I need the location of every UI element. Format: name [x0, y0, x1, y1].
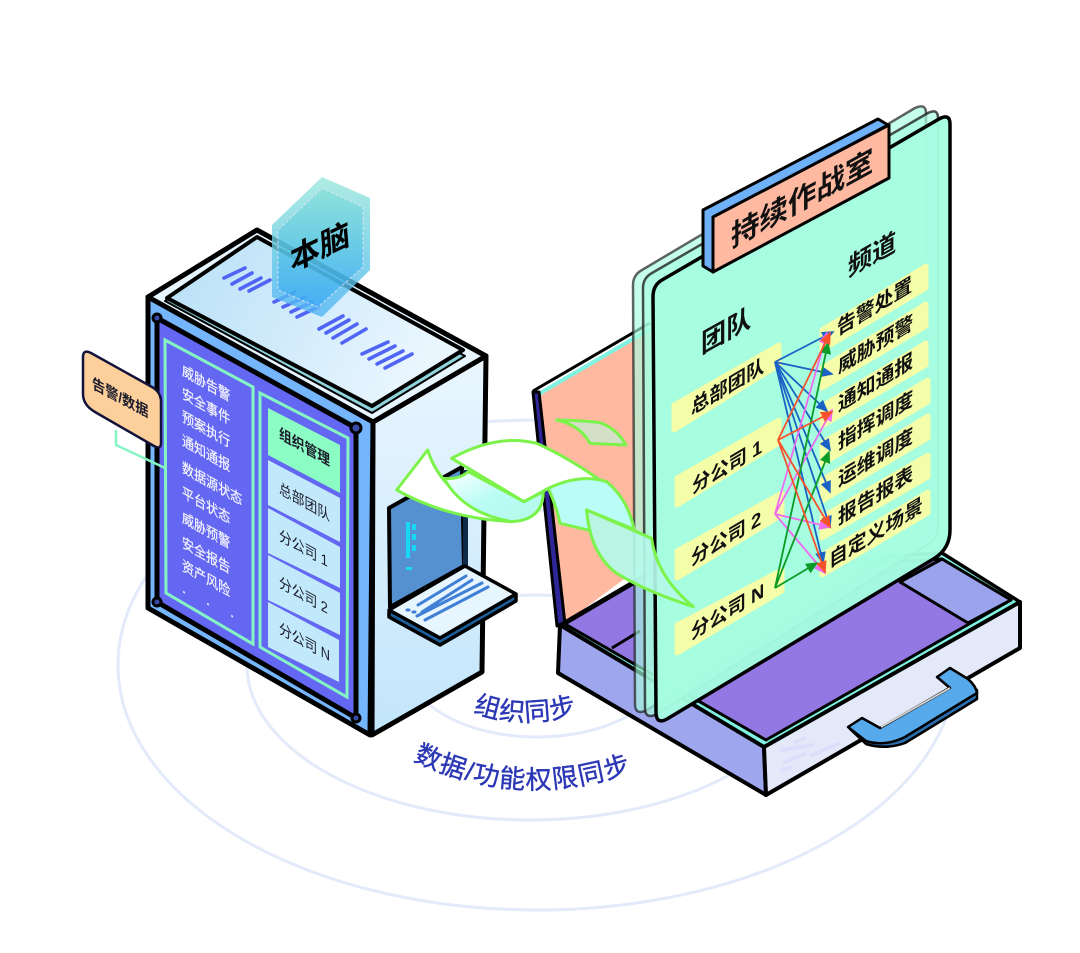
right team panel: 总部团队 [279, 480, 330, 525]
server cabinet [148, 230, 486, 735]
team to channel connections [775, 332, 833, 588]
label: data and permission sync: 数据/功能权限同步 [414, 742, 627, 792]
interior light strip [900, 559, 1011, 623]
case right wall [764, 602, 1020, 795]
front sheet [653, 117, 950, 721]
left list panel [165, 340, 253, 644]
channel names: 自定义场景 [829, 493, 923, 573]
case left wall [558, 625, 766, 795]
column heading: channels: 频道 [848, 227, 896, 283]
team names: 分公司 2 [691, 507, 761, 571]
server right face [372, 356, 486, 735]
right band [548, 479, 634, 531]
right team panel: 分公司 1 [279, 527, 328, 571]
faint scratches [782, 738, 838, 770]
magenta links [775, 333, 832, 573]
war-room sheets [633, 106, 950, 721]
orange links [778, 333, 832, 572]
left list panel: 威胁预警 [182, 509, 230, 552]
brain hexagon [272, 177, 370, 317]
title tab: 持续作战室 [731, 143, 873, 255]
case interior [565, 559, 1011, 740]
laptop [389, 467, 516, 645]
channel names: 指挥调度 [838, 387, 913, 455]
handle [848, 668, 977, 747]
case rim [560, 553, 1020, 747]
team names: 分公司 1 [692, 435, 762, 499]
right team panel: 分公司 N [279, 620, 330, 665]
sync ribbon arrows [397, 420, 693, 607]
screen panel [157, 318, 356, 718]
open lid [533, 323, 650, 626]
vent slots [224, 268, 412, 368]
left list panel: . . . [182, 580, 242, 626]
channel names [829, 273, 923, 573]
blue links [775, 332, 833, 563]
arrow tail [587, 510, 693, 607]
screw heads [153, 314, 361, 722]
keyboard lines [407, 576, 488, 620]
left list panel: 通知通报 [182, 432, 230, 475]
back sheet [633, 106, 926, 712]
alert data tag [83, 352, 165, 468]
left list panel: 威胁告警 [182, 362, 230, 405]
briefcase [533, 323, 1020, 795]
left list panel: 安全报告 [182, 534, 230, 577]
sync rings [118, 420, 956, 910]
channel rows [822, 266, 928, 575]
left list panel: 数据源状态 [182, 459, 242, 508]
channel names: 运维调度 [838, 424, 913, 492]
green links [775, 343, 829, 588]
lower band [444, 472, 543, 522]
right team panel: 组织管理 [279, 424, 330, 470]
server top face [148, 230, 486, 422]
team names: 总部团队 [691, 354, 765, 420]
team names: 分公司 N [691, 579, 764, 645]
middle sheet [643, 111, 938, 716]
team rows [674, 345, 782, 653]
right team panel [260, 393, 348, 697]
left list panel: 预案执行 [182, 408, 230, 451]
label: organisation sync: 组织同步 [474, 692, 573, 724]
column heading: teams: 团队 [701, 302, 751, 360]
channel names: 告警处置 [837, 273, 912, 341]
server top plate [165, 237, 465, 413]
left list panel: 资产风险 [182, 557, 230, 600]
right team panel: 分公司 2 [279, 574, 328, 618]
screen code marks [406, 522, 416, 570]
brain hexagon: 本脑 [289, 215, 351, 279]
upper band [452, 440, 600, 502]
left list panel: 安全事件 [182, 385, 230, 428]
small ghost ribbon [557, 420, 626, 445]
team names [691, 354, 765, 645]
channel names: 通知通报 [838, 349, 913, 417]
alert data tag: 告警/数据 [92, 374, 148, 422]
slot [445, 467, 470, 500]
laptop screen [389, 467, 464, 607]
server front face [148, 297, 373, 735]
left arrow head [397, 450, 512, 522]
title tab [703, 119, 889, 272]
laptop base [389, 567, 516, 645]
channel names: 威胁预警 [838, 311, 913, 379]
left list panel: 平台状态 [182, 484, 230, 527]
channel names: 报告报表 [838, 462, 913, 530]
